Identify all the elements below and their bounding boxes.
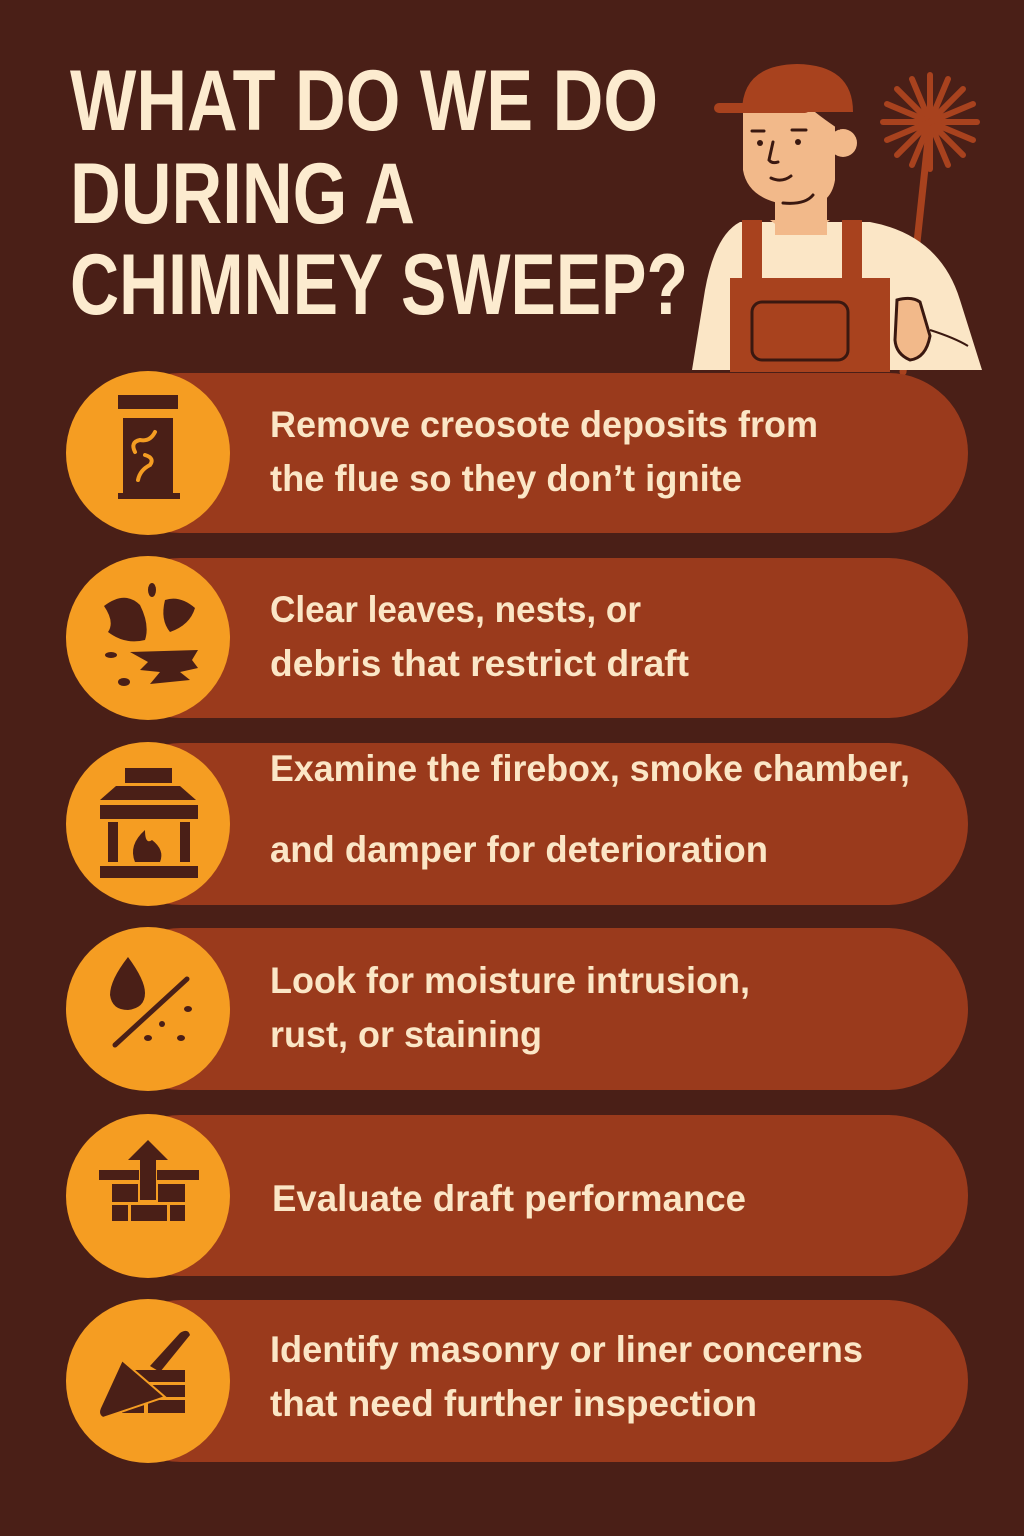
neck [775,195,827,235]
face [743,112,835,206]
item 2 [66,556,968,720]
illustration: chimney sweep character [692,64,982,372]
title: DURING A [70,146,415,242]
title: CHIMNEY SWEEP? [70,237,688,333]
icon: fireplace [100,768,198,878]
item 2: debris that restrict draft [270,643,689,684]
shirt [692,222,982,370]
item 6: that need further inspection [270,1383,757,1424]
item 3 [66,742,968,906]
item 6 [66,1299,968,1463]
title: WHAT DO WE DO [70,53,658,149]
item 4: Look for moisture intrusion, [270,960,750,1001]
item 1 [66,371,968,535]
brush [883,75,977,372]
item 1: the flue so they don’t ignite [270,458,742,499]
item 5: Evaluate draft performance [272,1178,746,1219]
hand [895,298,930,360]
icon: leaves and debris [104,583,198,686]
item 4: rust, or staining [270,1014,542,1055]
title [70,53,688,333]
item 1: Remove creosote deposits from [270,404,818,445]
item 4 [66,927,968,1091]
icon: draft arrow over chimney [99,1140,199,1221]
icon: moisture drop and slash [110,957,192,1045]
item 5 [66,1114,968,1278]
item 3: Examine the firebox, smoke chamber, [270,748,910,789]
icon: chimney flue with creosote [118,395,180,499]
hat [742,64,853,112]
overalls [742,220,762,300]
item 3: and damper for deterioration [270,829,768,870]
item 2: Clear leaves, nests, or [270,589,641,630]
item 6: Identify masonry or liner concerns [270,1329,863,1370]
icon: trowel and bricks [99,1331,190,1418]
